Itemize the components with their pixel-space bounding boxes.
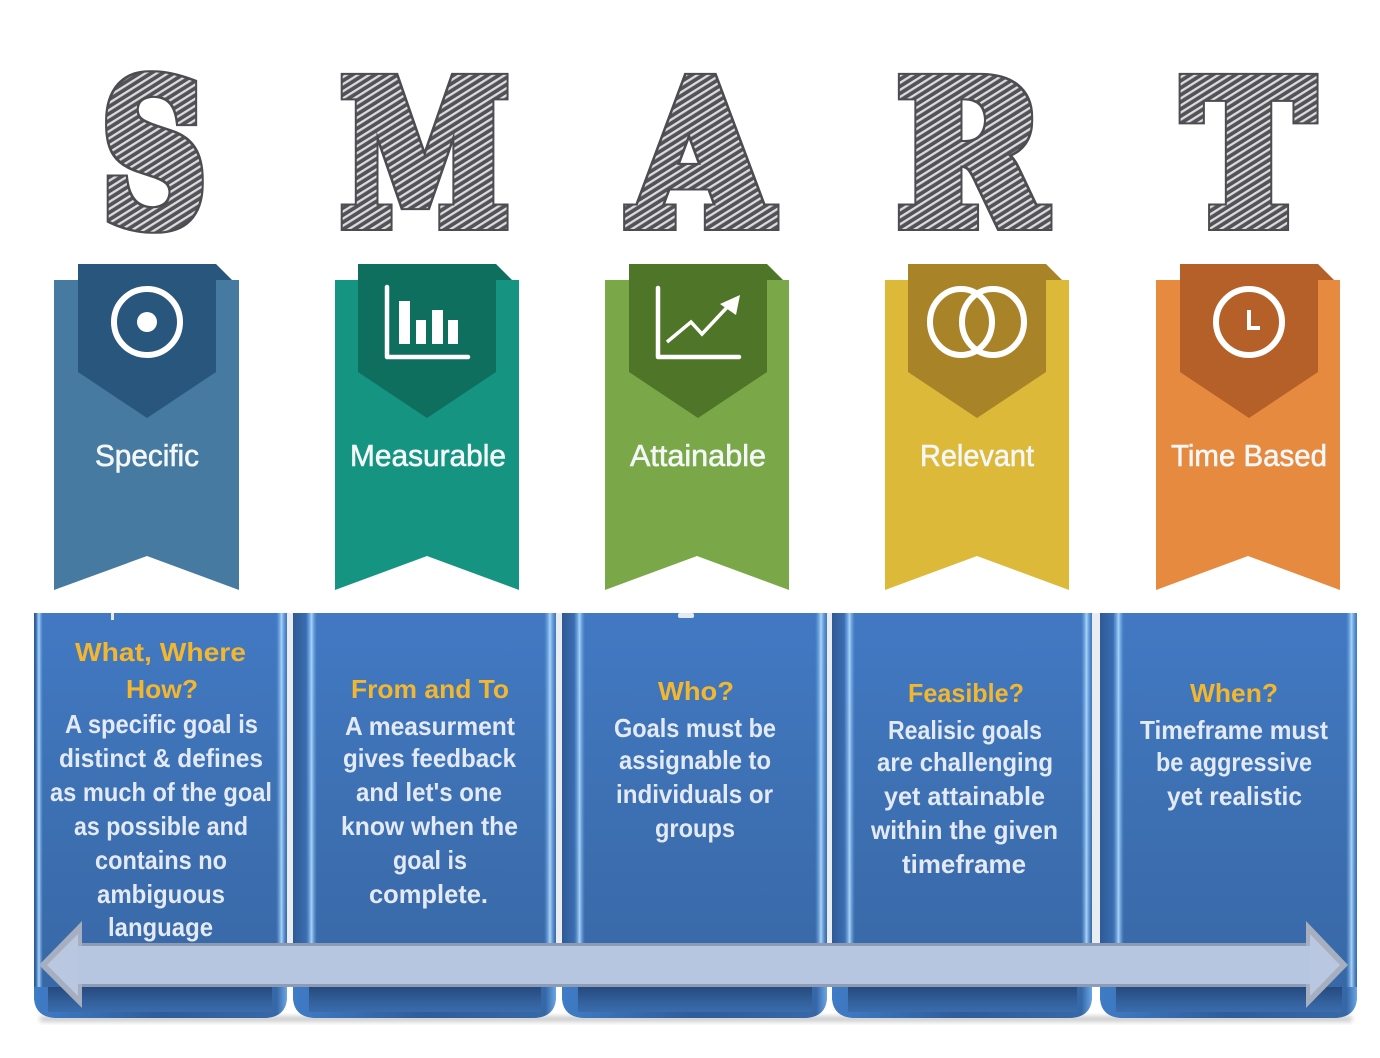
body text [1140,715,1328,811]
letter A: A [630,40,772,269]
body text: contains no [95,845,227,875]
ribbon: Specific [54,264,239,590]
panel: Measurable details [293,613,556,1018]
label: Relevant: Relevant [920,438,1034,473]
body text: Realisic goals [888,715,1042,745]
panel: Time Based details [1100,613,1357,1018]
panel: Attainable details [562,613,827,1018]
icon: growth line chart [658,288,740,357]
body text: gives feedback [343,743,516,773]
ribbon: Relevant [885,264,1069,590]
arrow: double-headed timeline [39,921,1348,1008]
panel: Specific details [34,613,287,1018]
body text: language [108,912,213,942]
heading: How? [126,674,198,704]
body text [50,709,272,942]
body text: and let's one [356,777,502,807]
ribbon: Measurable [335,264,519,590]
heading: What, Where [75,637,246,667]
title letters: SMART [102,40,1313,269]
body text: are challenging [877,747,1053,777]
body text: individuals or [616,779,773,809]
heading [75,637,246,704]
body text: know when the [341,811,518,841]
body text: A specific goal is [65,709,258,739]
heading: When? [1190,678,1278,708]
heading: Who? [658,676,734,706]
body text: within the given [870,815,1058,845]
body text [870,715,1058,879]
body text: as possible and [74,811,248,841]
body text [341,711,518,909]
icon: target [114,289,180,355]
body text: Timeframe must [1140,715,1328,745]
letter T: T [1184,40,1313,269]
body text: distinct & defines [59,743,263,773]
panel: Relevant details [832,613,1092,1018]
label: Measurable: Measurable [350,438,506,473]
heading: Feasible? [908,678,1024,708]
label: Attainable: Attainable [630,438,766,473]
letter R: R [897,40,1046,269]
body text: A measurment [345,711,515,741]
body text [614,713,776,843]
body text: timeframe [902,849,1026,879]
label: Time Based: Time Based [1171,438,1327,473]
heading: From and To [351,674,509,704]
body text: yet attainable [884,781,1045,811]
ribbon: Attainable [605,264,789,590]
icon: clock [1216,289,1282,355]
body text: groups [655,813,735,843]
body text: goal is [393,845,467,875]
body text: Goals must be [614,713,776,743]
letter S: S [102,40,206,269]
body text: ambiguous [97,879,225,909]
icon: overlapping circles [930,289,1024,355]
body text: as much of the goal [50,777,272,807]
ribbon: Time Based [1156,264,1340,590]
body text: be aggressive [1156,747,1312,777]
body text: complete. [369,879,488,909]
icon: bar chart [387,287,468,357]
letter M: M [341,40,509,269]
body text: assignable to [619,745,771,775]
body text: yet realistic [1167,781,1302,811]
label: Specific: Specific [95,438,199,473]
